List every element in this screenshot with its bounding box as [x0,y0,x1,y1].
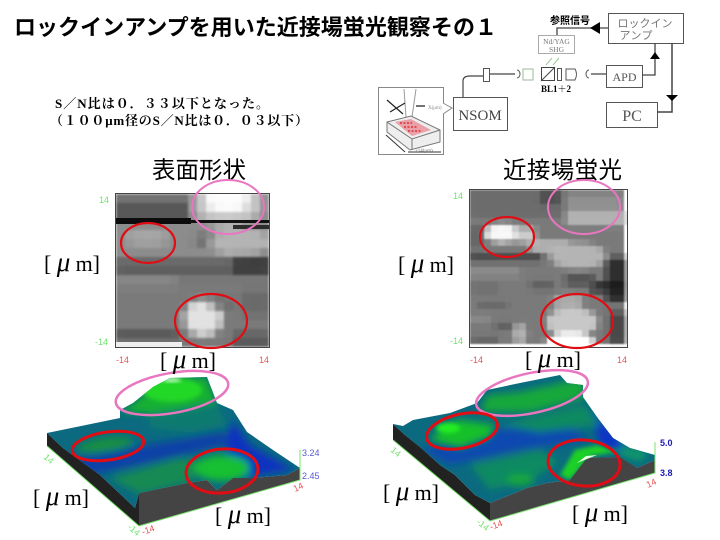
text block: S/N ratio note: S／N比は０．３３以下となった。 [55,96,269,111]
axis units: micrometre labels: [ μ m] [44,247,100,277]
heading: surface topography: 表面形状 [152,157,246,183]
axis units: micrometre labels: [ μ m] [398,248,454,278]
inset: sample and probe: ±14(μm) [415,149,433,154]
ticks: value labels [389,438,673,533]
axis labels: 2D map ticks: -14 [95,337,108,347]
box: PC [606,102,658,128]
chart: fluorescence 2D grayscale map [470,189,628,351]
axis labels: 2D map ticks: -14 [116,355,129,365]
wall: left side [47,433,139,526]
ticks: value labels: 14 [645,477,658,490]
box: Nd/YAG SHG laser [538,36,574,65]
axis labels: 2D map ticks: 14 [453,191,463,201]
box: Nd/YAG SHG laser: SHG [549,45,565,54]
optics: fiber and beam splitter [463,67,606,97]
ticks: value labels: 5.0 [660,438,673,448]
box: Nd/YAG SHG laser: Nd/YAG [543,37,570,46]
axis labels: 2D map ticks: 14 [259,355,269,365]
arrow: lock-in to PC [657,43,678,112]
chart: topography 3D surface [40,370,320,538]
axis labels: 2D map ticks: 14 [99,195,109,205]
arrow: APD to lock-in [642,43,660,75]
wall patch: exposed front wall under ridge [570,457,637,482]
axis units: micrometre labels [33,247,628,529]
label: reference signal: 参照信号 [550,14,590,27]
wall: front side [490,457,655,521]
axis units: micrometre labels: [ μ m] [383,476,439,506]
ticks: value labels: -14 [126,522,142,538]
axis labels: 2D map ticks: -14 [450,336,463,346]
title: ロックインアンプを用いた近接場蛍光観察その１ [14,15,497,40]
ticks: value labels: 14 [42,452,56,466]
arrow: reference signal [557,22,608,35]
box: APD [606,66,642,88]
axis labels: 2D map ticks: -14 [470,355,483,365]
ticks: value labels [42,448,320,538]
axis labels: 2D map ticks: 14 [617,355,627,365]
box: PC: PC [622,108,642,125]
box: APD: APD [612,70,637,84]
ticks: value labels: 2.45 [302,471,320,481]
ticks: value labels: -14 [488,518,504,532]
inset: sample and probe: X(μm) [428,106,442,111]
ticks: value labels: 14 [389,445,403,459]
heading: near-field fluorescence: 近接場蛍光 [503,157,622,183]
box: lock-in amplifier [608,14,684,44]
box: lock-in amplifier: アンプ [620,29,652,42]
text block: S/N ratio note [50,96,308,128]
diagram: lock-in NSOM setup [378,14,684,154]
axis units: micrometre labels: [ μ m] [572,497,628,527]
box: lock-in amplifier: ロックイン [618,17,672,30]
axis units: micrometre labels: [ μ m] [33,481,89,511]
axis labels: 2D map ticks [95,191,627,365]
axis units: micrometre labels: [ μ m] [525,343,581,373]
highlight ellipses: pink [112,180,620,424]
axis units: micrometre labels: [ μ m] [215,499,271,529]
ticks: value labels: -14 [140,523,156,537]
text block: S/N ratio note: （１００μm径のS／N比は０．０３以下） [50,113,308,128]
highlight: ridge crest [577,455,597,463]
chart: fluorescence 3D surface [385,370,673,533]
box: NSOM [454,98,508,130]
box: NSOM: NSOM [458,108,502,124]
axis: green frame and scale [47,446,300,526]
highlight ellipses: red [70,217,622,496]
label: BL1+2: BL1＋2 [541,84,572,94]
ticks: value labels: 3.24 [302,448,320,458]
surface [393,375,654,503]
inset: sample and probe [378,88,452,154]
chart: topography 2D grayscale map [115,182,270,348]
axis: green frame and scale [393,440,655,521]
wall: front side [139,468,300,526]
ticks: value labels: 3.8 [660,468,673,478]
wall: left side [393,424,490,521]
surface [47,377,300,508]
ticks: value labels: 14 [292,481,305,494]
axis units: micrometre labels: [ μ m] [160,344,216,374]
ticks: value labels: -14 [475,517,491,533]
